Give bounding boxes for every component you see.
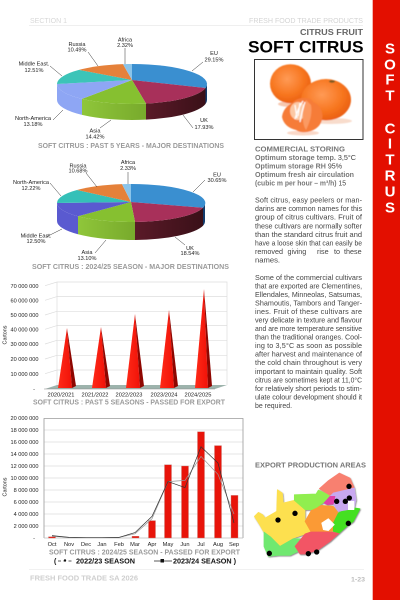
pie chart: past 5 years: EU: [210, 51, 218, 57]
pie chart: 2024/25 season: 2.33%: [120, 166, 136, 172]
bar chart: past 5 seasons: 20 000 000: [10, 357, 38, 363]
legend: season lines: [54, 558, 236, 566]
block: commercial storing: Optimum storage RH 95%: [255, 162, 343, 170]
text block: intro paragraph: [255, 196, 363, 264]
text block: intro paragraph: removed: [255, 247, 283, 256]
combo chart: 2024/25 season: 18 000 000: [10, 428, 38, 434]
caption: bar chart past 5 seasons: SOFT CITRUS : PAST 5 SEASONS - PASSED FOR EXPORT: [33, 400, 226, 406]
pie chart: past 5 years: Middle East.: [19, 62, 50, 68]
bar chart: past 5 seasons: [2, 282, 227, 398]
text block: cultivars paragraph: after harvest and maintenance of: [255, 350, 362, 359]
sidebar: vertical title: O: [384, 56, 396, 74]
combo chart: 2024/25 season: May: [163, 542, 174, 548]
bar chart: past 5 seasons: 2022/2023: [116, 392, 142, 398]
pie chart: 2024/25 season: Asia: [82, 250, 93, 256]
combo chart: 2024/25 season: Dec: [81, 542, 91, 548]
text block: cultivars paragraph: important to maintain quality. Soft: [255, 367, 362, 376]
sidebar: vertical title: U: [385, 184, 395, 200]
pie chart: past 5 years: North-America: [15, 116, 52, 122]
pie chart: 2024/25 season: Africa: [121, 160, 136, 166]
pie chart: past 5 years: 17.93%: [195, 125, 214, 131]
pie chart: past 5 years: UK: [200, 118, 208, 124]
heading: export production areas: EXPORT PRODUCTION AREAS: [255, 462, 366, 470]
text block: cultivars paragraph: be required.: [255, 401, 292, 410]
text block: cultivars paragraph: the cold chain throughout is very: [255, 358, 362, 367]
caption: pie chart 2024/25 season: SOFT CITRUS : 2024/25 SEASON - MAJOR DESTINATIONS: [32, 264, 229, 271]
pie chart: past 5 years: 10.49%: [68, 48, 87, 54]
text block: intro paragraph: to: [334, 247, 340, 256]
block: commercial storing: Optimum storage temp. 3,5°C: [255, 153, 356, 162]
footer: publication name: FRESH FOOD TRADE SA 2026: [30, 576, 138, 582]
text block: intro paragraph: group of citrus cultivars. Fruit of: [255, 213, 362, 222]
pie chart: 2024/25 season: 30.65%: [208, 178, 227, 184]
pie chart: past 5 years: Russia: [68, 42, 86, 48]
sidebar: vertical title: R: [385, 168, 396, 184]
block: commercial storing: [255, 144, 356, 188]
sidebar: vertical title: F: [385, 72, 395, 88]
combo chart: 2024/25 season: 12 000 000: [10, 464, 38, 470]
header: publication label: FRESH FOOD TRADE PRODUCTS: [249, 16, 363, 25]
text block: cultivars paragraph: ulate colour development should it: [255, 392, 362, 401]
pie chart: 2024/25 season: EU: [213, 172, 221, 178]
combo chart: 2024/25 season: 4 000 000: [14, 512, 38, 518]
bar chart: past 5 seasons: -: [33, 386, 35, 392]
combo chart: 2024/25 season: [2, 416, 243, 548]
caption: pie chart past 5 years: SOFT CITRUS : PAST 5 YEARS - MAJOR DESTINATIONS: [38, 143, 224, 150]
sidebar: vertical title: C: [385, 120, 396, 138]
sidebar: vertical title: T: [385, 152, 395, 168]
heading: citrus fruit: CITRUS FRUIT: [300, 28, 363, 37]
text block: cultivars paragraph: ines. Fruit of these cultivars are: [255, 307, 362, 316]
pie chart: 2024/25 season: 12.50%: [27, 239, 46, 245]
text block: cultivars paragraph: citrus are sometimes kept at 11,0°C: [255, 375, 362, 384]
text block: cultivars paragraph: very delicate in texture and flavour: [255, 316, 363, 324]
text block: cultivars paragraph: Ellendales, Minneolas, Satsumas,: [255, 290, 362, 299]
text block: cultivars paragraph: Some of the commercial cultivars: [255, 273, 362, 282]
bar chart: past 5 seasons: Cartons: [2, 325, 8, 344]
combo chart: 2024/25 season: Jan: [97, 542, 107, 548]
pie chart: 2024/25 season: North-America: [13, 180, 50, 186]
footer: page number: 1-23: [351, 578, 366, 584]
pie chart: past 5 years: Asia: [90, 128, 101, 134]
bar chart: past 5 seasons: 10 000 000: [10, 372, 38, 378]
bar chart: past 5 seasons: 2021/2022: [82, 392, 108, 398]
pie chart: 2024/25 season: 18.54%: [181, 251, 200, 257]
pie chart: past 5 years: 29.15%: [205, 58, 224, 64]
pie chart: past 5 years: [15, 38, 224, 140]
combo chart: 2024/25 season: 6 000 000: [14, 500, 38, 506]
pie chart: past 5 years: 14.42%: [86, 134, 105, 140]
bar chart: past 5 seasons: 50 000 000: [10, 313, 38, 319]
photo: mandarins: [254, 60, 363, 140]
map: South Africa provinces: [254, 473, 360, 556]
pie chart: past 5 years: 12.51%: [25, 68, 44, 74]
text block: cultivars paragraph: ing to 3,5°C as soon as possible: [255, 341, 362, 350]
sidebar: vertical title: S: [385, 40, 395, 58]
text block: intro paragraph: rise: [317, 247, 329, 256]
text block: intro paragraph: giving: [288, 247, 306, 256]
combo chart: 2024/25 season: Feb: [114, 542, 124, 548]
text block: intro paragraph: than the standard citrus fruit and: [255, 230, 362, 239]
legend: season lines: (: [54, 558, 57, 566]
text block: cultivars paragraph: and are more temperature sensitive: [255, 324, 362, 333]
bar chart: past 5 seasons: 60 000 000: [10, 298, 38, 304]
combo chart: 2024/25 season: Jul: [197, 542, 205, 548]
text block: intro paragraph: these: [344, 247, 362, 256]
combo chart: 2024/25 season: Nov: [64, 542, 74, 548]
legend: season lines: 2022/23 SEASON: [76, 558, 135, 566]
text block: intro paragraph: Soft citrus, easy peelers or man-: [255, 196, 363, 204]
block: commercial storing: Optimum fresh air circulation: [255, 170, 354, 179]
text block: intro paragraph: these cultivars are normally softer: [255, 221, 363, 230]
caption: combo chart 2024/25 season: SOFT CITRUS : 2024/25 SEASON - PASSED FOR EXPORT: [49, 550, 241, 556]
text block: cultivars paragraph: that are exported are Clementines,: [255, 281, 362, 290]
combo chart: 2024/25 season: Oct: [48, 542, 57, 548]
header: section label: SECTION 1: [30, 16, 67, 25]
sidebar: vertical title: S: [385, 200, 395, 216]
bar chart: past 5 seasons: 40 000 000: [10, 328, 38, 334]
bar chart: past 5 seasons: 2023/2024: [151, 392, 177, 398]
combo chart: 2024/25 season: -: [33, 536, 35, 542]
pie chart: 2024/25 season: 12.22%: [22, 186, 41, 192]
bar chart: past 5 seasons: 2024/2025: [185, 392, 211, 398]
pie chart: 2024/25 season: 10.68%: [69, 168, 88, 174]
pie chart: 2024/25 season: 13.10%: [78, 256, 97, 262]
pie chart: past 5 years: 2.32%: [117, 43, 133, 49]
pie chart: 2024/25 season: [13, 160, 227, 262]
combo chart: 2024/25 season: 10 000 000: [10, 476, 38, 482]
text block: cultivars paragraph: than the traditional oranges. Cool-: [255, 333, 363, 342]
bar chart: past 5 seasons: 30 000 000: [10, 342, 38, 348]
combo chart: 2024/25 season: 16 000 000: [10, 440, 38, 446]
block: commercial storing: COMMERCIAL STORING: [255, 144, 345, 154]
combo chart: 2024/25 season: Aug: [213, 542, 223, 548]
sidebar: vertical title: I: [388, 136, 392, 152]
sidebar: vertical title: [373, 0, 400, 600]
combo chart: 2024/25 season: Mar: [130, 542, 140, 548]
bar chart: past 5 seasons: 2020/2021: [48, 392, 74, 398]
combo chart: 2024/25 season: Apr: [148, 542, 157, 548]
pie chart: 2024/25 season: Middle East.: [21, 234, 52, 240]
sidebar: vertical title: T: [385, 88, 395, 104]
pie chart: past 5 years: 13.18%: [24, 122, 43, 128]
text block: cultivars paragraph: for relatively short periods to stim-: [255, 384, 363, 393]
combo chart: 2024/25 season: 20 000 000: [10, 416, 38, 422]
text block: intro paragraph: names.: [255, 256, 280, 264]
bar chart: past 5 seasons: 70 000 000: [10, 284, 38, 290]
text block: cultivars paragraph: Shamoutis, Tambors and Tanger-: [255, 298, 363, 307]
pie chart: past 5 years: Africa: [118, 38, 133, 44]
block: commercial storing: (cubic m per hour – m³/h) 15: [255, 178, 346, 188]
pie chart: 2024/25 season: UK: [186, 246, 194, 252]
text block: cultivars paragraph: [255, 273, 363, 410]
combo chart: 2024/25 season: 2 000 000: [14, 524, 38, 530]
combo chart: 2024/25 season: 14 000 000: [10, 452, 38, 458]
combo chart: 2024/25 season: Sep: [229, 542, 239, 548]
legend: season lines: 2023/24 SEASON ): [173, 558, 236, 566]
combo chart: 2024/25 season: Jun: [180, 542, 190, 548]
combo chart: 2024/25 season: Cartons: [2, 477, 8, 496]
title: soft citrus: SOFT CITRUS: [248, 38, 364, 56]
combo chart: 2024/25 season: 8 000 000: [14, 488, 38, 494]
text block: intro paragraph: have a loose skin that can easily be: [255, 238, 362, 248]
text block: intro paragraph: darins are common names for this: [255, 204, 362, 213]
pie chart: 2024/25 season: Russia: [69, 164, 87, 170]
